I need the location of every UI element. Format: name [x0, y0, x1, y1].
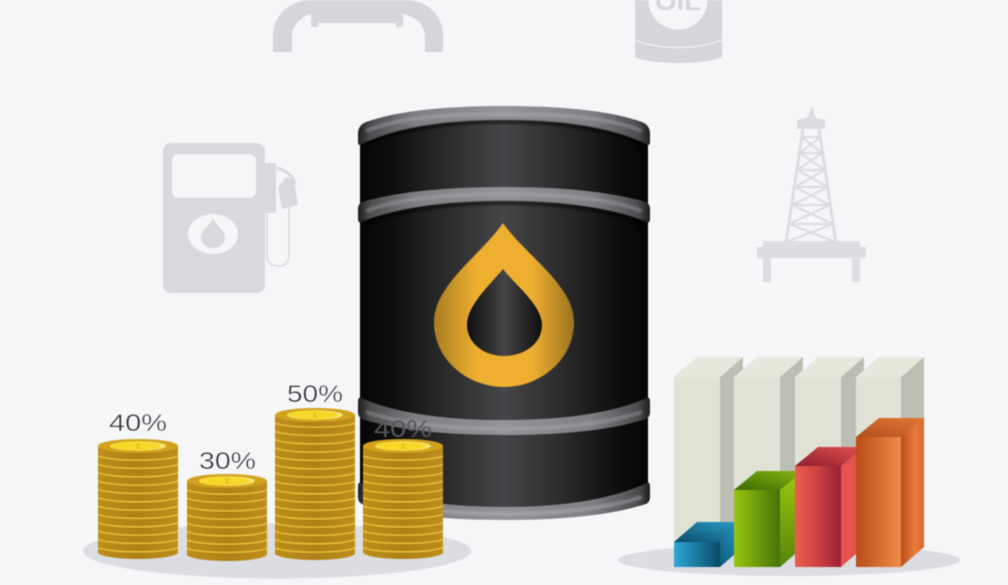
- coin stack 50%: $: [313, 412, 317, 420]
- background columns: [674, 357, 924, 567]
- orange bar: [856, 418, 924, 567]
- barrel upper band: [358, 187, 650, 225]
- coin stack 30%: $: [225, 478, 229, 486]
- barrel lower band: [358, 398, 650, 435]
- icon: oil rig: [757, 105, 866, 282]
- green bar: [734, 471, 803, 567]
- red bar: [795, 447, 864, 567]
- oil barrel: [358, 106, 650, 520]
- blue bar: [674, 522, 743, 567]
- coin stack 40%: [98, 410, 178, 559]
- icon: pipe: [273, 0, 443, 52]
- bar chart shadow: [618, 544, 960, 576]
- coin stack 40% over barrel: [363, 416, 443, 559]
- coin stack 50%: [275, 381, 355, 560]
- coin chart shadow: [83, 524, 471, 578]
- coin stack 40% over barrel: 40%: [374, 416, 432, 443]
- barrel body: [360, 112, 648, 510]
- coin stack 40%: $: [136, 444, 140, 450]
- coin stack 40% over barrel: $: [401, 444, 405, 450]
- coin stack 30%: 30%: [199, 448, 256, 475]
- barrel bottom rim: [358, 483, 650, 520]
- coin stack 50%: 50%: [287, 381, 343, 408]
- 3D bar chart: [674, 357, 924, 567]
- coin stack 30%: [187, 448, 267, 561]
- icon: gold oil drop: [434, 223, 574, 387]
- icon: oil can: [635, 0, 722, 63]
- barrel top rim: [358, 106, 650, 146]
- icon: fuel pump: [163, 143, 298, 293]
- coin stack 40%: 40%: [109, 410, 167, 437]
